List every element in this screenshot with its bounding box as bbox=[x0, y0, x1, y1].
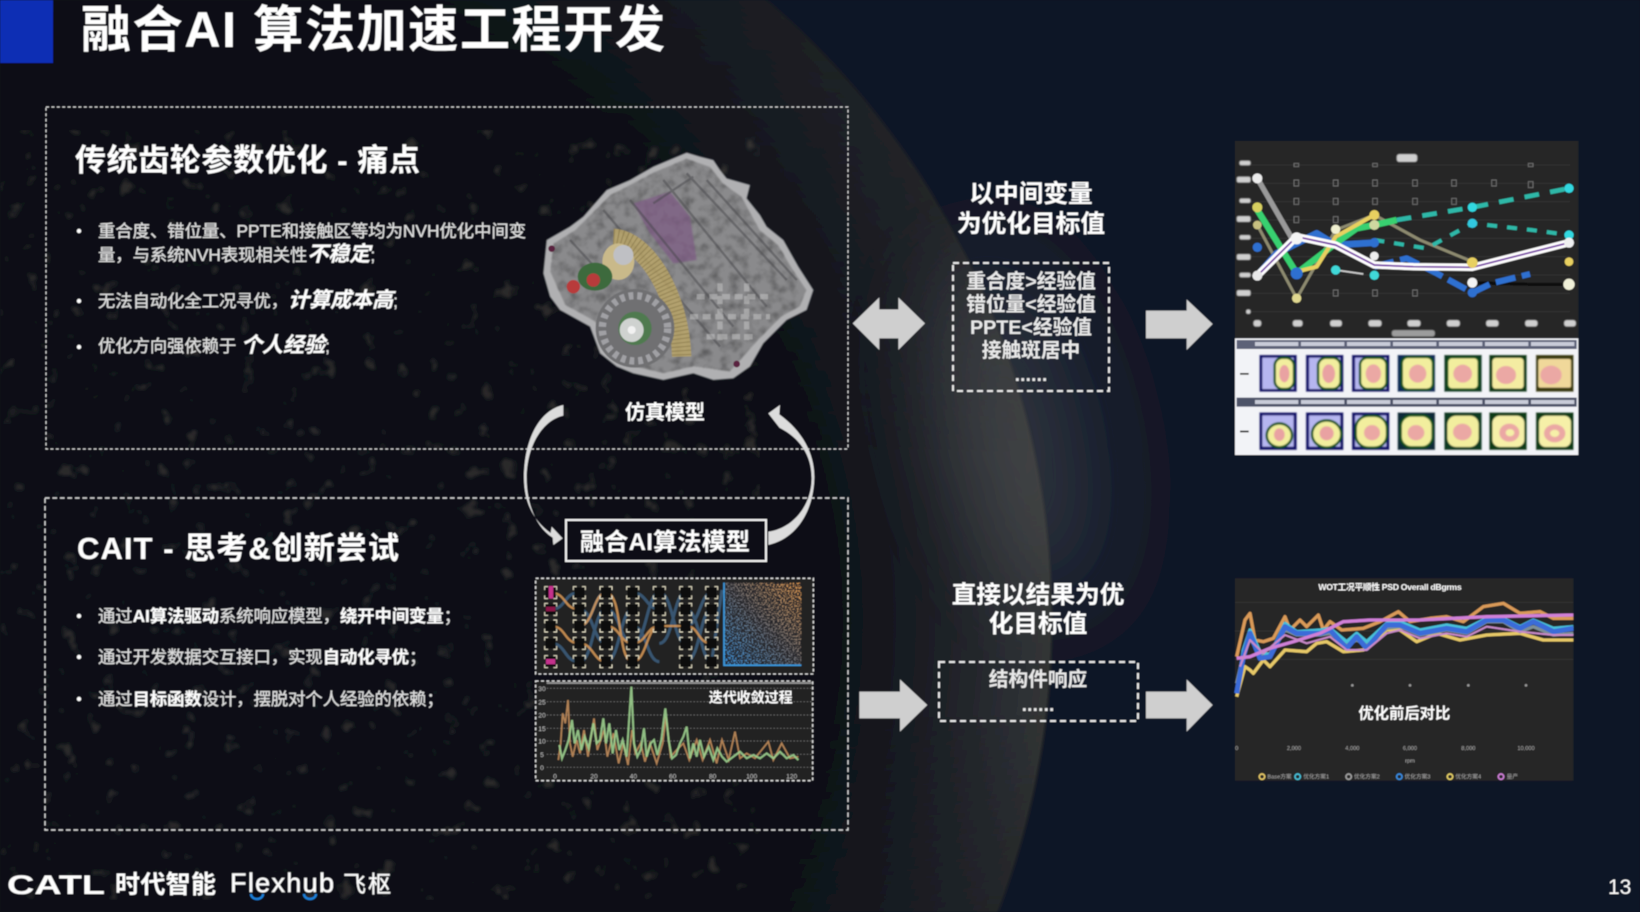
blue title tab bbox=[0, 0, 53, 63]
logo: CATL: CATL bbox=[7, 870, 105, 900]
box: intermediate criteria: 接触斑居中 bbox=[982, 340, 1080, 362]
legend: Base方案 bbox=[1267, 773, 1292, 781]
heading: result as target bbox=[952, 581, 1124, 638]
box: intermediate criteria bbox=[953, 263, 1109, 391]
x axis labels: 10,000 bbox=[1517, 746, 1535, 752]
bullet list: CAIT: 通过开发数据交互接口，实现自动化寻优； bbox=[98, 647, 426, 667]
heading: intermediate variables target: 以中间变量 bbox=[969, 180, 1093, 208]
x axis labels: 2,000 bbox=[1287, 746, 1301, 752]
chart: iteration convergence: 0 bbox=[553, 774, 557, 781]
heading: intermediate variables target bbox=[957, 180, 1105, 238]
chart: iteration convergence: 15 bbox=[538, 726, 546, 733]
box: intermediate criteria: 重合度>经验值 bbox=[966, 270, 1096, 293]
chart: iteration convergence: 40 bbox=[630, 774, 637, 781]
arrow to top chart bbox=[1146, 299, 1213, 350]
bullet list: pain points: 重合度、错位量、PPTE和接触区等均为NVH优化中间变 bbox=[98, 221, 526, 241]
logo: Flexhub: Flexhub bbox=[230, 868, 334, 898]
bullet list: CAIT: 通过目标函数设计，摆脱对个人经验的依赖； bbox=[98, 689, 444, 709]
chart: iteration convergence: 60 bbox=[669, 774, 677, 781]
chart: parallel coordinates with scatter bbox=[536, 578, 813, 674]
box: intermediate criteria: ...... bbox=[1015, 364, 1047, 386]
x axis labels: 0 bbox=[1235, 746, 1238, 752]
x axis labels: 4,000 bbox=[1345, 746, 1359, 752]
footer logos bbox=[7, 868, 391, 900]
chart: iteration convergence: 0 bbox=[540, 765, 544, 772]
legend: 优化方案1 bbox=[1303, 773, 1329, 781]
x axis labels: rpm bbox=[1405, 758, 1415, 764]
box: intermediate criteria: PPTE<经验值 bbox=[970, 316, 1092, 339]
box: structural response bbox=[939, 662, 1138, 721]
heading: pain points: 传统齿轮参数优化 - 痛点 bbox=[75, 143, 420, 178]
label: simulation model: 仿真模型 bbox=[625, 400, 705, 424]
heading: result as target: 化目标值 bbox=[989, 610, 1087, 638]
bullet list: pain points bbox=[77, 221, 526, 357]
arrow to result chart bbox=[1146, 679, 1213, 732]
heading: CAIT: CAIT - 思考&创新尝试 bbox=[77, 531, 399, 566]
line chart bbox=[1235, 141, 1578, 338]
curved arrow: AI model to simulation (right) bbox=[768, 405, 814, 545]
label box: AI algorithm model bbox=[566, 520, 766, 561]
label: iteration convergence: 迭代收敛过程 bbox=[709, 690, 793, 706]
x axis labels bbox=[1235, 746, 1535, 764]
bullet list: pain points: 量，与系统NVH表现相关性不稳定; bbox=[98, 242, 375, 266]
bullet list: pain points: 优化方向强依赖于 个人经验; bbox=[98, 333, 330, 357]
legend: 优化方案3 bbox=[1405, 773, 1430, 781]
chart: iteration convergence bbox=[536, 681, 813, 781]
chart: iteration convergence: 20 bbox=[590, 774, 598, 781]
chart: iteration convergence: 25 bbox=[538, 699, 546, 706]
chart: iteration convergence: 80 bbox=[709, 774, 717, 781]
box: intermediate criteria: 错位量<经验值 bbox=[966, 293, 1096, 316]
chart: iteration convergence: 100 bbox=[746, 774, 758, 781]
double arrow bbox=[853, 297, 925, 350]
box: structural response: 结构件响应 bbox=[989, 668, 1087, 691]
chart: iteration convergence: 30 bbox=[538, 686, 546, 693]
chart: iteration convergence: 120 bbox=[786, 774, 798, 781]
contact patch table bbox=[1235, 338, 1578, 455]
logo text: Flexhub Chinese name: 飞枢 bbox=[343, 871, 391, 897]
page number: 13 bbox=[1608, 876, 1631, 899]
title: 融合AI 算法加速工程开发 bbox=[81, 2, 665, 58]
chart: iteration convergence: 10 bbox=[538, 739, 546, 746]
bullet list: CAIT bbox=[77, 606, 461, 709]
panel: traditional gear optimisation pain points bbox=[46, 107, 848, 449]
panel: CAIT innovation bbox=[45, 498, 848, 830]
x axis labels: 6,000 bbox=[1403, 746, 1417, 752]
chart: iteration convergence: 20 bbox=[538, 713, 546, 720]
heading: intermediate variables target: 为优化目标值 bbox=[957, 210, 1105, 238]
label box: AI algorithm model: 融合AI算法模型 bbox=[580, 529, 750, 556]
box: structural response: ...... bbox=[1022, 694, 1054, 716]
chart title: WOT工况平顺性 PSD Overall dBgrms bbox=[1318, 581, 1462, 592]
curved arrow: simulation to AI model (left) bbox=[524, 405, 563, 545]
arrow from AI model to structural response bbox=[859, 679, 927, 732]
chart: iteration convergence: 5 bbox=[540, 752, 544, 759]
bullet list: pain points: 无法自动化全工况寻优，计算成本高; bbox=[98, 288, 398, 312]
heading: result as target: 直接以结果为优 bbox=[952, 581, 1124, 609]
icon: blue accents under e and u bbox=[251, 894, 316, 899]
legend: 优化方案4 bbox=[1455, 773, 1481, 781]
legend bbox=[1259, 773, 1518, 781]
logo text: CATL Chinese name: 时代智能 bbox=[115, 871, 216, 899]
label: before and after comparison: 优化前后对比 bbox=[1358, 705, 1450, 723]
legend: 量产 bbox=[1507, 773, 1518, 781]
panel: top right line chart and contact patches bbox=[1235, 141, 1578, 455]
simulation gearbox model bbox=[543, 153, 813, 380]
legend: 优化方案2 bbox=[1354, 773, 1380, 781]
panel: before and after optimisation chart bbox=[1235, 578, 1573, 781]
x axis labels: 8,000 bbox=[1461, 746, 1475, 752]
bullet list: CAIT: 通过AI算法驱动系统响应模型，绕开中间变量； bbox=[98, 606, 461, 626]
